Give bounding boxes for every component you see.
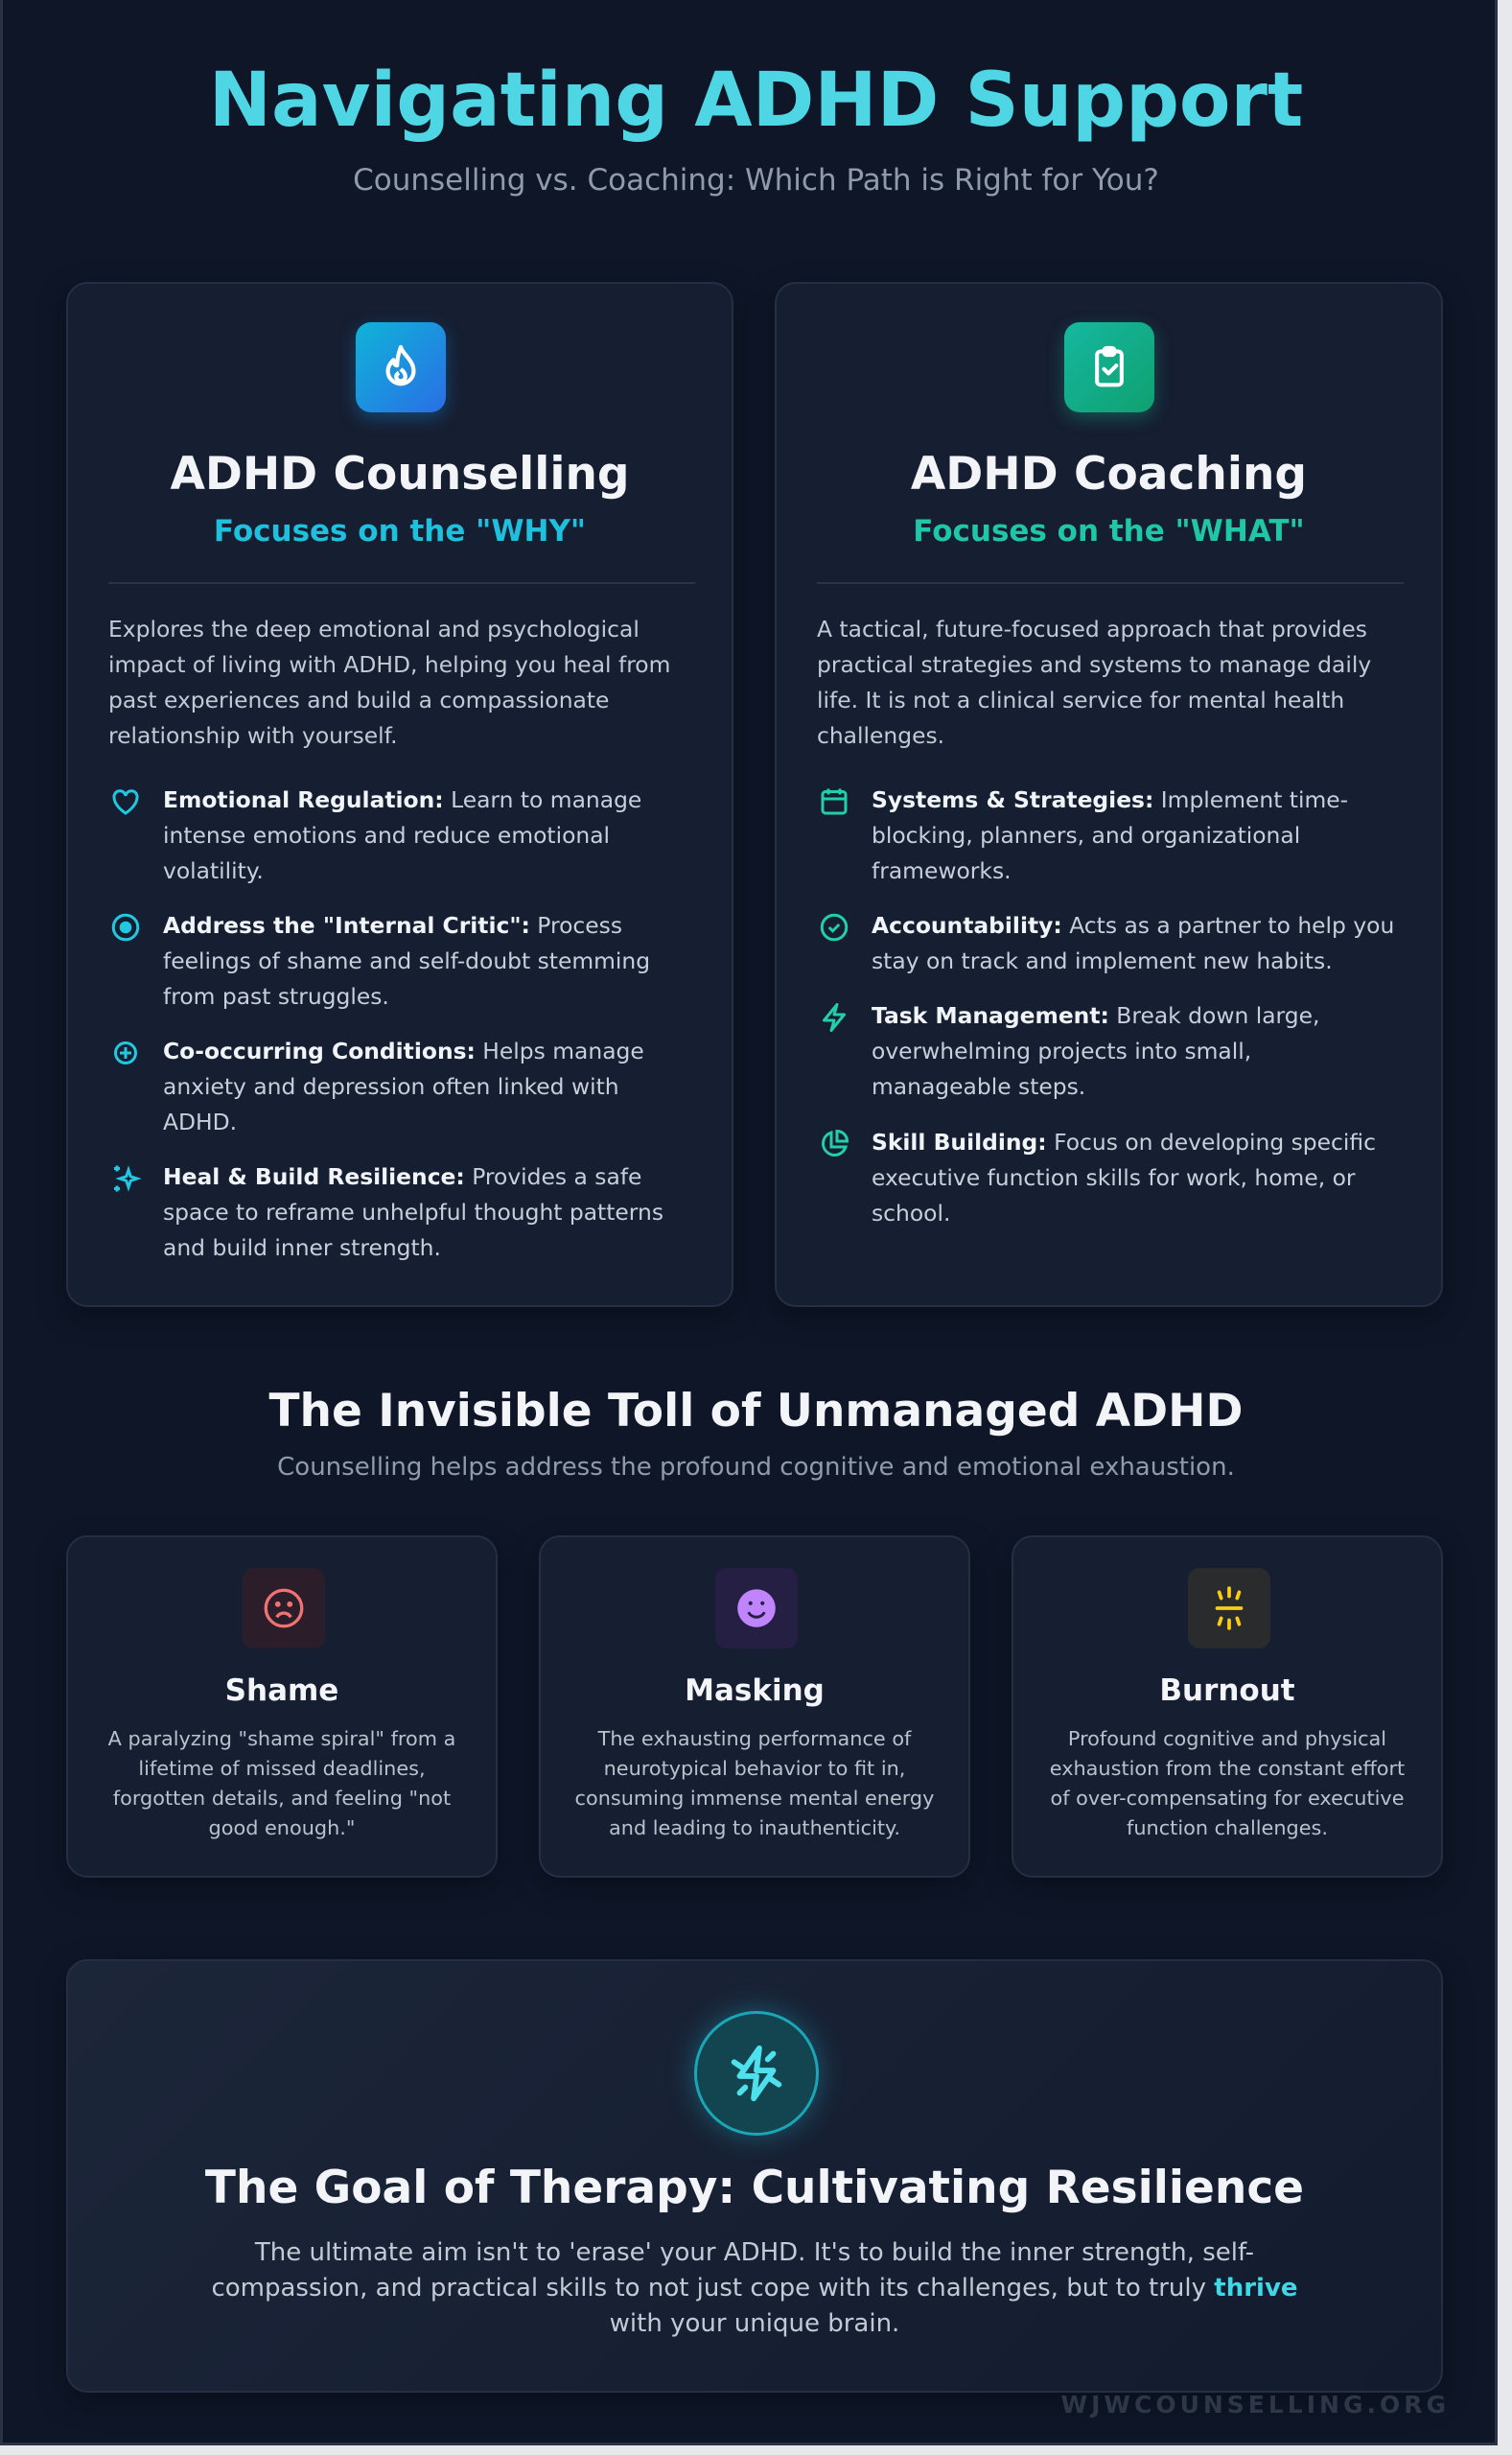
item: systems [821, 786, 1348, 884]
text [107, 1727, 455, 1839]
text: good enough." [209, 1816, 355, 1839]
bullet list: blocking, planners, and organizational [872, 822, 1300, 849]
item: co-occurring [114, 1038, 644, 1135]
intro text: challenges. [817, 722, 944, 749]
text: and leading to inauthenticity. [609, 1816, 900, 1839]
bullet list: space to reframe unhelpful thought patterns [163, 1199, 663, 1226]
icon: clipboard [1064, 322, 1154, 412]
text: with your unique brain. [610, 2309, 899, 2338]
watermark: WJWCOUNSELLING.ORG [1061, 2391, 1450, 2419]
text [1050, 1727, 1405, 1839]
text: compassion, and practical skills to not just cope with its challenges, but to truly thrive [211, 2274, 1298, 2303]
icon: resilience circle [694, 2011, 819, 2136]
bullet list: from past struggles. [163, 983, 389, 1010]
heading: ADHD Coaching: ADHD Coaching [911, 448, 1307, 501]
bullet list: Heal & Build Resilience: Provides a safe [163, 1163, 641, 1190]
subtitle: Counselling vs. Coaching: Which Path is Right for You? [353, 163, 1159, 198]
bullet list: Systems & Strategies: Implement time- [872, 786, 1348, 813]
bullet list: Emotional Regulation: Learn to manage [163, 786, 641, 813]
panel: goal of therapy [66, 1959, 1443, 2393]
bullet list: Accountability: Acts as a partner to help you [872, 912, 1394, 939]
bullet list: feelings of shame and self-doubt stemming [163, 947, 650, 974]
text: A paralyzing "shame spiral" from a [108, 1727, 455, 1750]
bullet list: volatility. [163, 857, 264, 884]
item: accountability [821, 912, 1394, 974]
icon: smiling mask [715, 1568, 798, 1648]
intro text: practical strategies and systems to manage daily [817, 651, 1371, 678]
section subtitle: Counselling helps address the profound cognitive and emotional exhaustion. [277, 1453, 1235, 1482]
bullet list: Skill Building: Focus on developing specific [872, 1129, 1376, 1156]
card: masking [539, 1535, 970, 1878]
text: function challenges. [1127, 1816, 1328, 1839]
item: resilience [114, 1163, 663, 1261]
intro text: life. It is not a clinical service for mental health [817, 687, 1344, 713]
heading: ADHD Counselling: ADHD Counselling [170, 448, 630, 501]
icon: flame [356, 322, 446, 412]
item: emotional regulation [112, 786, 641, 884]
bullet list: executive function skills for work, home, or [872, 1164, 1356, 1191]
intro text: A tactical, future-focused approach that provides [817, 616, 1367, 643]
text [575, 1727, 934, 1839]
bullet list: intense emotions and reduce emotional [163, 822, 610, 849]
text: of over-compensating for executive [1050, 1787, 1405, 1810]
intro text [108, 616, 670, 749]
text: Profound cognitive and physical [1068, 1727, 1386, 1750]
text: lifetime of missed deadlines, [138, 1757, 426, 1780]
bullet list: stay on track and implement new habits. [872, 947, 1333, 974]
bullet list [111, 786, 663, 1261]
title: Shame [225, 1673, 338, 1708]
bullet list: overwhelming projects into small, [872, 1038, 1251, 1064]
bullet list: Address the "Internal Critic": Process [163, 912, 622, 939]
panel: coaching [775, 282, 1443, 1307]
text: The ultimate aim isn't to 'erase' your ADHD. It's to build the inner strength, self- [255, 2238, 1254, 2267]
heading: The Goal of Therapy: Cultivating Resilience [205, 2162, 1304, 2214]
bullet list: and build inner strength. [163, 1234, 441, 1261]
card: burnout [1012, 1535, 1443, 1878]
intro text: impact of living with ADHD, helping you heal from [108, 651, 670, 678]
subheading: Focuses on the "WHAT" [913, 514, 1305, 549]
title: Masking [685, 1673, 825, 1708]
text: forgotten details, and feeling "not [113, 1787, 451, 1810]
bullet list: manageable steps. [872, 1073, 1085, 1100]
bullet list: Co-occurring Conditions: Helps manage [163, 1038, 644, 1064]
intro text: Explores the deep emotional and psychological [108, 616, 640, 643]
bullet list: anxiety and depression often linked with [163, 1073, 619, 1100]
bullet list: frameworks. [872, 857, 1012, 884]
subheading: Focuses on the "WHY" [214, 514, 586, 549]
icon: burst [1188, 1568, 1270, 1648]
icon: sad face [243, 1568, 325, 1648]
card: shame [66, 1535, 498, 1878]
bullet list: ADHD. [163, 1109, 237, 1135]
text: The exhausting performance of [598, 1727, 911, 1750]
bullet list: Task Management: Break down large, [872, 1002, 1319, 1029]
section heading: The Invisible Toll of Unmanaged ADHD [268, 1385, 1244, 1438]
text: consuming immense mental energy [575, 1787, 934, 1810]
item: internal critic [111, 912, 650, 1010]
intro text [817, 616, 1371, 749]
panel: counselling [66, 282, 733, 1307]
bullet list: school. [872, 1200, 950, 1227]
text: exhaustion from the constant effort [1050, 1757, 1405, 1780]
title: Burnout [1159, 1673, 1295, 1708]
item: task management [823, 1002, 1319, 1100]
item: skill building [822, 1129, 1376, 1227]
text [211, 2238, 1298, 2338]
text: neurotypical behavior to fit in, [604, 1757, 905, 1780]
intro text: past experiences and build a compassionate [108, 687, 609, 713]
intro text: relationship with yourself. [108, 722, 398, 749]
bullet list [821, 786, 1394, 1227]
title: Navigating ADHD Support [209, 58, 1303, 144]
